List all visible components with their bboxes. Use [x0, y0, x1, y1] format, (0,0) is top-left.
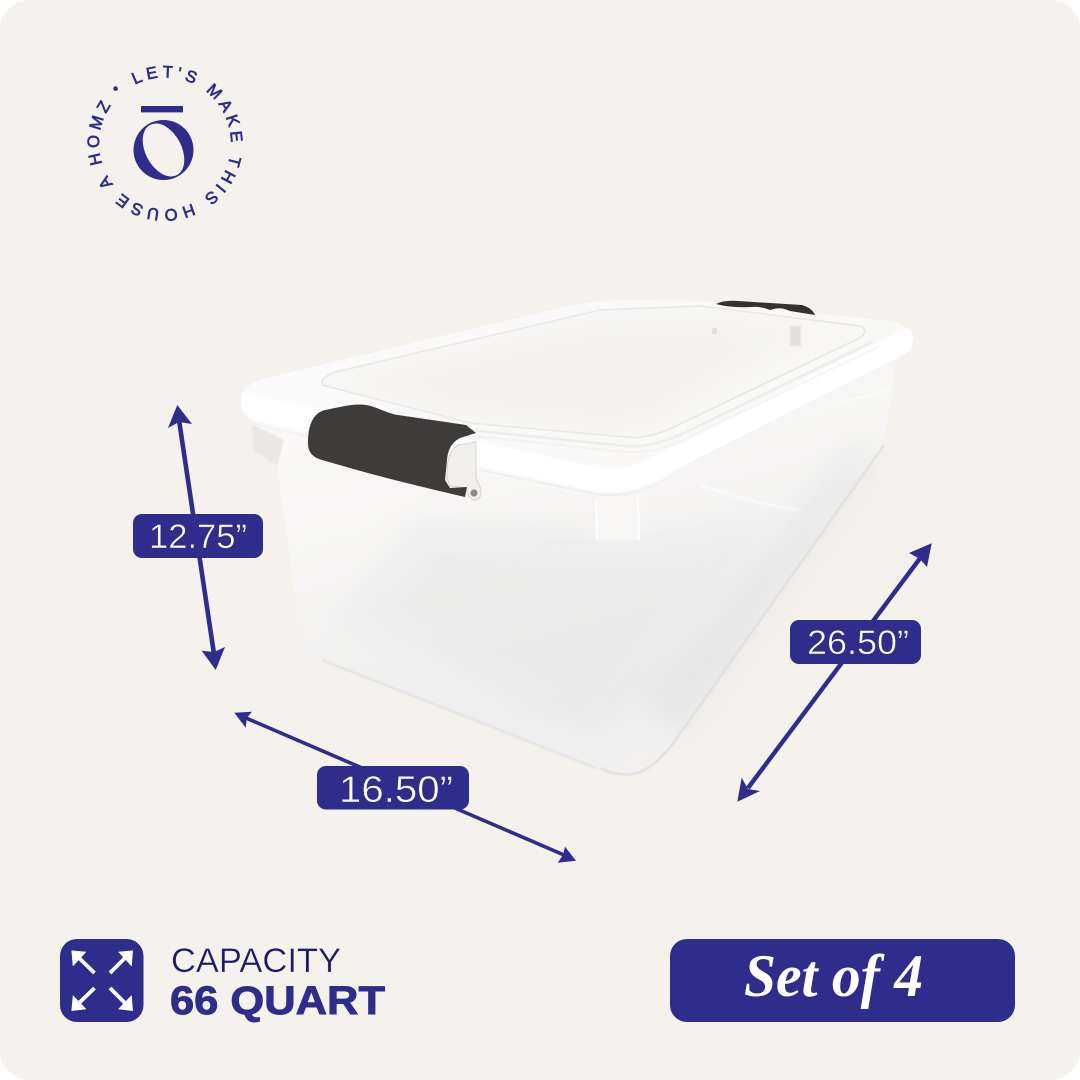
box body [252, 352, 898, 774]
plastic storage box [240, 300, 925, 774]
capacity icon [60, 939, 144, 1022]
circular slogan: LET'S MAKE THIS HOUSE A HOMZ [87, 66, 243, 221]
front latch handle [308, 404, 476, 497]
capacity text: 66 QUART [170, 979, 385, 1023]
logo macron [141, 106, 183, 112]
width arrow [234, 712, 576, 863]
lid inner panel [322, 306, 880, 452]
logo letter o [134, 116, 194, 184]
rear latch handle [716, 301, 815, 315]
body shading [252, 390, 885, 774]
set of 4 badge [670, 939, 1015, 1022]
height label: 12.75” [149, 518, 247, 556]
capacity text: CAPACITY [171, 942, 341, 980]
capacity text [170, 942, 385, 1023]
lid rim highlight [480, 330, 913, 496]
box lid [241, 300, 913, 496]
height label [133, 514, 263, 558]
length label [790, 620, 921, 664]
length arrow [737, 543, 932, 802]
set of 4 badge: Set of 4 [744, 943, 923, 1009]
front latch clip [447, 442, 481, 500]
height arrow [168, 405, 225, 670]
slogan separator dot [113, 86, 118, 91]
width label: 16.50” [339, 769, 453, 810]
width label [317, 766, 469, 810]
brand logo badge [87, 66, 243, 221]
length label: 26.50” [807, 624, 909, 662]
